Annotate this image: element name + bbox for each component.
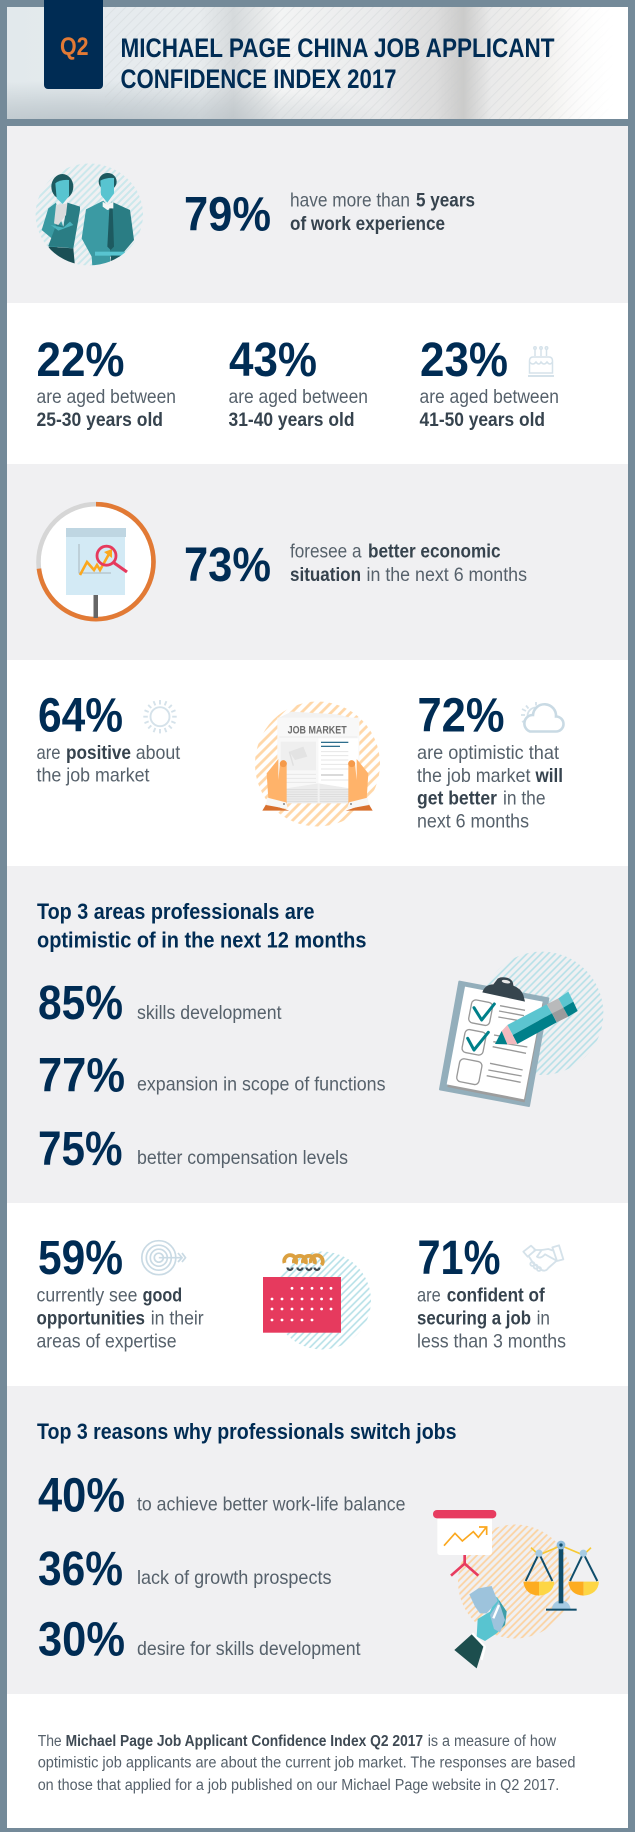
stat: 71%: are	[417, 1285, 441, 1307]
stat: 23%: are aged between	[420, 386, 559, 408]
stat: 59%: good	[143, 1285, 182, 1307]
Q2 tab	[44, 0, 103, 89]
newspaper illustration: JOB MARKET	[288, 724, 347, 736]
stat: 64%	[36, 690, 181, 787]
stat: 30%	[38, 1614, 361, 1667]
stat: 71%: 71%	[418, 1232, 500, 1285]
panel: job market sentiment	[7, 660, 628, 866]
stat: 73%: situation	[290, 564, 361, 586]
newspaper illustration	[255, 702, 380, 826]
footnote text	[38, 1733, 575, 1794]
stat: 64%: 64%	[38, 690, 123, 743]
stat: 22%: are aged between	[36, 386, 176, 408]
stat: 40%: 40%	[38, 1470, 125, 1523]
stat: 40%: to achieve better work-life balance	[137, 1494, 406, 1516]
stat: 73%: in the next 6 months	[366, 564, 527, 586]
stat: 43%: are aged between	[228, 386, 368, 408]
stat: 72%	[417, 690, 563, 833]
stat: 72%: get better	[417, 788, 497, 810]
stat: 59%: areas of expertise	[36, 1330, 176, 1352]
stat: 71%: less than 3 months	[417, 1330, 566, 1352]
heading	[37, 899, 366, 952]
stat: 23%	[420, 334, 559, 431]
stat: 22%: 22%	[36, 334, 124, 387]
stat: 43%	[228, 334, 368, 431]
footnote text: optimistic job applicants are about the current job market. The responses are based	[38, 1755, 575, 1772]
stat: 72%: the job market	[417, 765, 531, 787]
stat: 36%: lack of growth prospects	[137, 1567, 332, 1589]
icon: handshake	[523, 1245, 563, 1271]
stat: 43%: 43%	[229, 334, 317, 387]
stat: 72%: 72%	[418, 690, 504, 743]
stat: 71%: confident of	[447, 1285, 545, 1307]
stat: 59%: currently see	[36, 1285, 138, 1307]
footnote text: Michael Page Job Applicant Confidence Index Q2 2017	[66, 1733, 423, 1750]
stat: 79%: have more than	[290, 190, 410, 212]
icon: chart on flip board in progress ring	[38, 504, 154, 619]
stat: 75%	[38, 1123, 348, 1176]
stat: 79%: 5 years	[416, 190, 475, 212]
icon: target with arrow	[142, 1241, 186, 1275]
stat: 64%: about	[136, 742, 181, 764]
stat: 73%: foresee a	[290, 541, 362, 563]
Q2 tab: Q2	[60, 33, 88, 61]
stat: 59%: 59%	[38, 1232, 123, 1285]
stat: 72%: next 6 months	[417, 811, 529, 833]
heading: Top 3 reasons why professionals switch jobs	[37, 1419, 456, 1444]
icon: sun behind cloud	[521, 702, 564, 732]
stat: 23%: 23%	[420, 334, 508, 387]
stat: 77%	[38, 1050, 386, 1103]
stat: 73%	[184, 539, 527, 592]
stat: 64%: positive	[66, 742, 131, 764]
title: CONFIDENCE INDEX 2017	[120, 64, 396, 94]
footnote text: is a measure of how	[428, 1733, 557, 1750]
stat: 79%	[184, 188, 475, 242]
panel: footnote	[7, 1694, 628, 1828]
panel: reasons for switching jobs	[7, 1386, 628, 1694]
stat: 73%: 73%	[184, 539, 271, 592]
calendar illustration	[263, 1252, 371, 1350]
heading: optimistic of in the next 12 months	[37, 927, 366, 952]
stat: 22%: 25-30 years old	[36, 409, 163, 431]
stat: 30%: desire for skills development	[137, 1638, 361, 1660]
illustration: chart board, scales and money in hand	[433, 1510, 599, 1668]
icon: sun	[143, 700, 177, 733]
stat: 36%: 36%	[38, 1543, 123, 1596]
panel: age groups	[7, 303, 628, 464]
stat: 72%: will	[535, 765, 563, 787]
title	[120, 33, 555, 94]
stat: 79%: 79%	[184, 188, 271, 242]
panel: work experience	[7, 126, 628, 303]
stat: 75%: 75%	[38, 1123, 122, 1176]
header banner	[7, 0, 628, 119]
stat: 77%: 77%	[38, 1050, 125, 1103]
stat: 71%: securing a job	[417, 1308, 531, 1330]
title: MICHAEL PAGE CHINA JOB APPLICANT	[120, 33, 555, 63]
clipboard illustration	[440, 952, 603, 1106]
stat: 73%: better economic	[368, 541, 501, 563]
stat: 59%: opportunities	[36, 1308, 145, 1330]
icon: birthday cake	[528, 347, 554, 376]
stat: 85%: 85%	[38, 977, 123, 1030]
stat: 59%: in their	[151, 1308, 204, 1330]
stat: 75%: better compensation levels	[137, 1147, 348, 1169]
stat: 77%: expansion in scope of functions	[137, 1074, 386, 1096]
panel: top 3 optimistic areas	[7, 866, 628, 1203]
stat: 71%	[417, 1232, 566, 1352]
footnote text: The	[38, 1733, 62, 1750]
stat: 22%	[36, 334, 176, 431]
stat: 72%: are optimistic that	[417, 742, 560, 764]
stat: 64%: the job market	[36, 765, 150, 787]
stat: 64%: are	[36, 742, 60, 764]
footnote text: on those that applied for a job published on our Michael Page website in Q2 2017.	[38, 1777, 559, 1794]
stat: 72%: in the	[503, 788, 546, 810]
panel: economic outlook	[7, 464, 628, 660]
stat: 79%: of work experience	[290, 213, 445, 235]
stat: 40%	[38, 1470, 406, 1523]
stat: 23%: 41-50 years old	[420, 409, 545, 431]
stat: 30%: 30%	[38, 1614, 125, 1667]
icon: business people	[36, 164, 143, 267]
heading: Top 3 areas professionals are	[37, 899, 314, 924]
stat: 71%: in	[537, 1308, 550, 1330]
stat: 59%	[36, 1232, 204, 1352]
stat: 85%	[38, 977, 282, 1030]
stat: 43%: 31-40 years old	[228, 409, 354, 431]
stat: 36%	[38, 1543, 332, 1596]
panel: opportunities and confidence	[7, 1203, 628, 1386]
stat: 85%: skills development	[137, 1002, 282, 1024]
